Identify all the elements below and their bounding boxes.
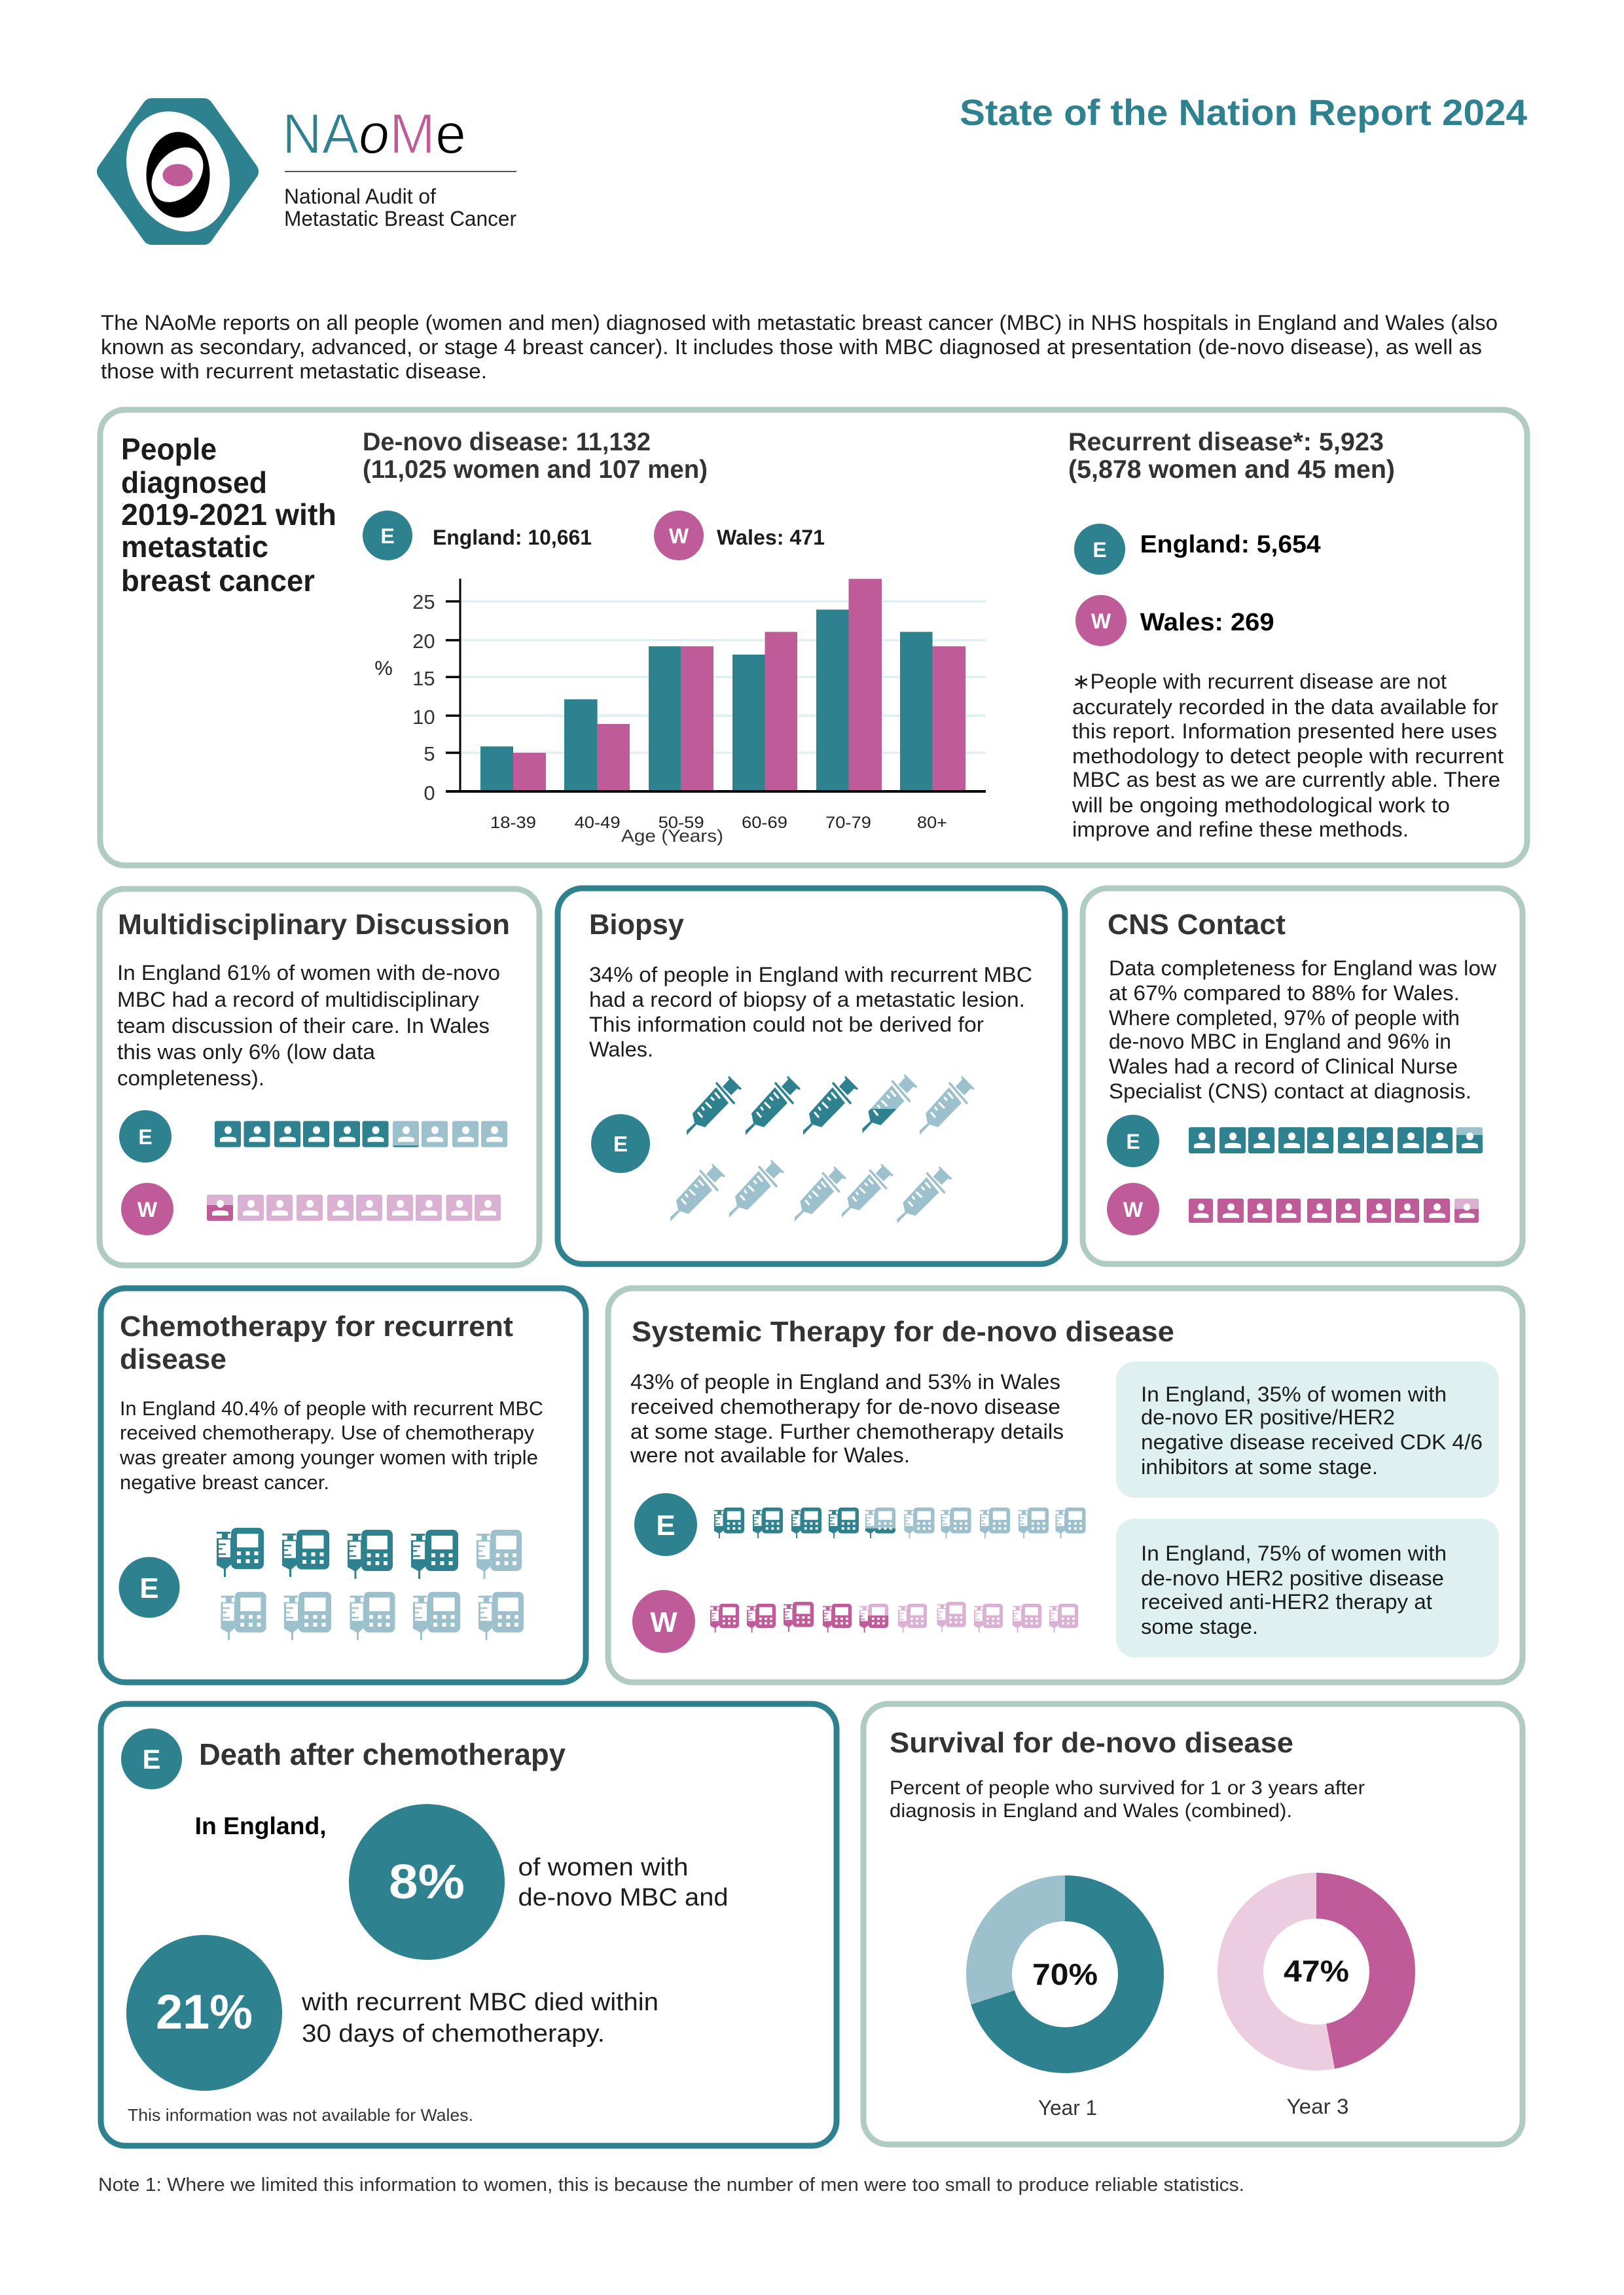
callout: anti-HER2 therapy — [1116, 1519, 1499, 1657]
logo hexagon — [107, 108, 249, 235]
recurrent footnote: MBC as best as we are currently able. There — [1072, 768, 1500, 791]
callout: CDK 4/6 inhibitors: negative disease received CDK 4/6 — [1141, 1430, 1483, 1454]
x axis labels: 18-39 — [490, 814, 536, 832]
stat text: women de-novo: de-novo MBC and — [518, 1884, 728, 1911]
badge: England recurrent: E — [1092, 538, 1107, 562]
badge: England: E — [142, 1744, 161, 1775]
heading: Death after chemotherapy — [199, 1737, 566, 1771]
x axis labels: 50-59 — [659, 814, 704, 832]
pictogram: syringes 34% — [670, 1074, 975, 1223]
panel: systemic therapy for de-novo disease — [608, 1288, 1523, 1682]
callout: CDK 4/6 inhibitors: inhibitors at some stage. — [1141, 1455, 1378, 1479]
badge: Wales: W — [137, 1198, 158, 1221]
heading: people diagnosed: People — [121, 432, 217, 466]
pictogram: infusion pumps 40.4% — [217, 1528, 524, 1640]
x axis labels — [490, 814, 947, 832]
intro text — [101, 311, 1498, 383]
title: State of the Nation Report 2024 — [960, 92, 1527, 133]
badge: England: E — [613, 1132, 628, 1156]
heading: Multidisciplinary Discussion — [118, 909, 510, 941]
recurrent footnote: this report. Information presented here uses — [1072, 719, 1497, 743]
lead-in text: In England, — [195, 1813, 327, 1839]
body text: In England 40.4% of people with recurrent MBC — [120, 1397, 543, 1420]
panel: survival for de-novo disease — [863, 1704, 1523, 2144]
panel: multidisciplinary discussion — [99, 889, 539, 1265]
callout: CDK 4/6 inhibitors: de-novo ER positive/HER2 — [1141, 1405, 1395, 1429]
body text: de-novo MBC in England and 96% in — [1109, 1030, 1451, 1053]
pictogram: England 43% — [714, 1508, 1085, 1538]
y axis labels: 25 — [412, 590, 435, 613]
callout: anti-HER2 therapy: In England, 75% of women with — [1141, 1542, 1447, 1565]
England bars — [480, 609, 932, 791]
panel: death after chemotherapy — [101, 1704, 837, 2146]
footnote: Note 1: Where we limited this information to women, this is because the number of men were too small to produce reliable statistics. — [98, 2175, 1244, 2196]
heading — [120, 1310, 513, 1375]
badge: Wales de-novo: W — [669, 524, 689, 548]
body text: diagnosis in England and Wales (combined). — [890, 1800, 1292, 1822]
body text: 43% of people in England and 53% in Wales — [630, 1370, 1060, 1394]
badge: England — [119, 1557, 179, 1618]
stat text: recurrent — [301, 1989, 659, 2048]
heading: disease — [120, 1343, 226, 1375]
callout: anti-HER2 therapy: de-novo HER2 positive disease — [1141, 1566, 1444, 1590]
body text: at some stage. Further chemotherapy details — [630, 1420, 1064, 1443]
heading: people diagnosed: diagnosed — [121, 465, 267, 499]
heading: Systemic Therapy for de-novo disease — [632, 1316, 1174, 1348]
heading: people diagnosed: breast cancer — [121, 564, 315, 598]
stat text: recurrent: 30 days of chemotherapy. — [302, 2020, 605, 2048]
recurrent footnote: improve and refine these methods. — [1072, 818, 1409, 841]
badge: England: E — [656, 1509, 676, 1542]
body text: Where completed, 97% of people with — [1109, 1006, 1460, 1030]
pictogram: Wales 96% — [1189, 1199, 1479, 1223]
body text: was greater among younger women with triple — [119, 1446, 538, 1469]
panel: biopsy — [558, 888, 1065, 1264]
badge: England — [121, 1728, 182, 1790]
body text: completeness). — [117, 1066, 264, 1090]
body text: were not available for Wales. — [630, 1443, 910, 1467]
donut chart: year 1: 70% — [1032, 1957, 1098, 1991]
body text: 34% of people in England with recurrent MBC — [589, 963, 1032, 986]
body text: Data completeness for England was low — [1109, 956, 1497, 980]
stat circle: 21% — [126, 1935, 282, 2091]
body text — [630, 1370, 1064, 1467]
body text: this was only 6% (low data — [117, 1040, 375, 1064]
x axis labels: 80+ — [917, 814, 947, 832]
pictogram: England 97% — [1189, 1127, 1483, 1153]
logo subtitle: Metastatic Breast Cancer — [284, 207, 516, 230]
label: year 1: Year 1 — [1038, 2096, 1097, 2120]
England de-novo count: England: 10,661 — [433, 526, 592, 549]
x axis title: Age (Years) — [621, 826, 723, 846]
stat circle: 8% — [349, 1804, 505, 1960]
body text: This information could not be derived for — [589, 1013, 984, 1036]
recurrent footnote — [1072, 670, 1504, 841]
stat text: women de-novo: of women with — [518, 1854, 689, 1881]
body text: In England 61% of women with de-novo — [117, 961, 500, 985]
y axis labels: 20 — [412, 630, 435, 653]
body text: Percent of people who survived for 1 or 3 years after — [890, 1777, 1365, 1799]
body text — [117, 961, 500, 1090]
axes — [446, 579, 986, 791]
intro text: known as secondary, advanced, or stage 4 breast cancer). It includes those with MBC diagnosed at presentation (de-novo disease), as well as — [101, 335, 1482, 359]
badge: Wales — [1107, 1183, 1159, 1235]
body text: MBC had a record of multidisciplinary — [117, 988, 479, 1011]
stat text: women de-novo — [518, 1854, 728, 1911]
badge: England — [591, 1114, 650, 1173]
callout: anti-HER2 therapy: some stage. — [1141, 1615, 1258, 1638]
Wales recurrent count: Wales: 269 — [1140, 609, 1274, 636]
stat circle: 8%: 8% — [389, 1854, 465, 1909]
panel: CNS contact — [1083, 888, 1523, 1264]
intro text: The NAoMe reports on all people (women and men) diagnosed with metastatic breast cancer (MBC) in NHS hospitals in England and Wales (also — [101, 311, 1498, 334]
badge: England de-novo — [363, 511, 412, 560]
badge: Wales de-novo — [654, 511, 704, 560]
note: Wales not available: This information was not available for Wales. — [128, 2105, 473, 2125]
x axis labels: 60-69 — [742, 814, 787, 832]
body text — [1109, 956, 1497, 1103]
bar chart: age distribution — [374, 579, 986, 846]
de-novo totals: (11,025 women and 107 men) — [363, 456, 708, 484]
y axis labels: 5 — [424, 742, 435, 765]
badge: England recurrent — [1074, 524, 1125, 575]
badge: Wales: W — [1123, 1198, 1144, 1221]
heading: people diagnosed: 2019-2021 with — [121, 497, 336, 532]
body text: had a record of biopsy of a metastatic lesion. — [589, 988, 1025, 1011]
de-novo totals — [363, 428, 708, 484]
heading: CNS Contact — [1108, 909, 1286, 941]
body text — [589, 963, 1032, 1061]
intro text: those with recurrent metastatic disease. — [101, 359, 487, 383]
y axis labels — [412, 590, 435, 804]
badge: Wales — [121, 1183, 173, 1235]
badge: Wales recurrent — [1075, 595, 1127, 646]
panel: people diagnosed — [100, 410, 1527, 865]
recurrent totals: (5,878 women and 45 men) — [1068, 456, 1395, 484]
body text: Wales. — [589, 1038, 653, 1061]
badge: England — [634, 1493, 697, 1556]
pictogram: Wales 53% — [710, 1602, 1078, 1633]
x axis labels: 70-79 — [825, 814, 871, 832]
badge: England: E — [138, 1125, 153, 1149]
body text — [119, 1397, 543, 1494]
y axis labels: 15 — [412, 667, 435, 690]
body text: received chemotherapy. Use of chemotherapy — [120, 1421, 534, 1444]
recurrent footnote: ∗People with recurrent disease are not — [1072, 670, 1447, 693]
heading: people diagnosed: metastatic — [121, 530, 268, 564]
body text: Specialist (CNS) contact at diagnosis. — [1109, 1079, 1471, 1103]
recurrent footnote: methodology to detect people with recurrent — [1072, 744, 1504, 768]
body text: Wales had a record of Clinical Nurse — [1109, 1055, 1458, 1078]
stat text: recurrent: with recurrent MBC died within — [301, 1989, 659, 2016]
badge: Wales — [632, 1590, 695, 1653]
badge: England — [119, 1110, 171, 1163]
body text — [890, 1777, 1365, 1822]
England recurrent count: England: 5,654 — [1140, 531, 1321, 558]
body text: team discussion of their care. In Wales — [117, 1014, 490, 1038]
Wales bars — [513, 579, 965, 791]
logo subtitle — [284, 185, 516, 230]
recurrent footnote: accurately recorded in the data available for — [1072, 695, 1498, 719]
badge: England: E — [139, 1572, 159, 1604]
y axis title: % — [374, 657, 393, 679]
body text: received chemotherapy for de-novo disease — [630, 1395, 1060, 1419]
de-novo totals: De-novo disease: 11,132 — [363, 428, 651, 456]
body text: negative breast cancer. — [120, 1471, 329, 1494]
label: year 3: Year 3 — [1287, 2095, 1348, 2118]
logo — [107, 94, 516, 249]
Wales de-novo count: Wales: 471 — [717, 526, 825, 549]
y axis labels: 10 — [412, 706, 435, 729]
badge: England de-novo: E — [380, 524, 395, 548]
pictogram: Wales 6% — [207, 1195, 501, 1221]
callout: CDK 4/6 inhibitors: In England, 35% of women with — [1141, 1382, 1447, 1406]
logo wordmark: NAoMe — [282, 103, 466, 166]
badge: Wales recurrent: W — [1091, 609, 1111, 633]
body text: at 67% compared to 88% for Wales. — [1109, 981, 1460, 1005]
logo eye — [107, 94, 249, 249]
badge: England — [1107, 1115, 1159, 1167]
heading: Chemotherapy for recurrent — [120, 1310, 513, 1343]
x axis labels: 40-49 — [575, 814, 621, 832]
badge: Wales: W — [650, 1606, 677, 1638]
heading: Biopsy — [589, 909, 685, 941]
donut chart: year 3 — [1240, 1896, 1392, 2048]
recurrent totals — [1068, 428, 1395, 484]
panel: chemotherapy for recurrent disease — [101, 1288, 586, 1682]
logo subtitle: National Audit of — [284, 185, 436, 208]
recurrent totals: Recurrent disease*: 5,923 — [1068, 428, 1384, 456]
heading: Survival for de-novo disease — [890, 1727, 1293, 1759]
donut chart: year 1 — [989, 1898, 1141, 2050]
gridlines — [460, 602, 986, 753]
y axis labels: 0 — [424, 782, 435, 804]
pictogram: England 61% — [215, 1121, 507, 1147]
badge: England: E — [1126, 1130, 1140, 1153]
stat circle: 21%: 21% — [156, 1985, 253, 2039]
callout: anti-HER2 therapy: received anti-HER2 therapy at — [1141, 1590, 1432, 1614]
callout: CDK 4/6 inhibitors — [1116, 1362, 1499, 1498]
donut chart: year 3: 47% — [1284, 1954, 1349, 1988]
recurrent footnote: will be ongoing methodological work to — [1072, 793, 1450, 817]
heading: people diagnosed — [121, 432, 336, 598]
